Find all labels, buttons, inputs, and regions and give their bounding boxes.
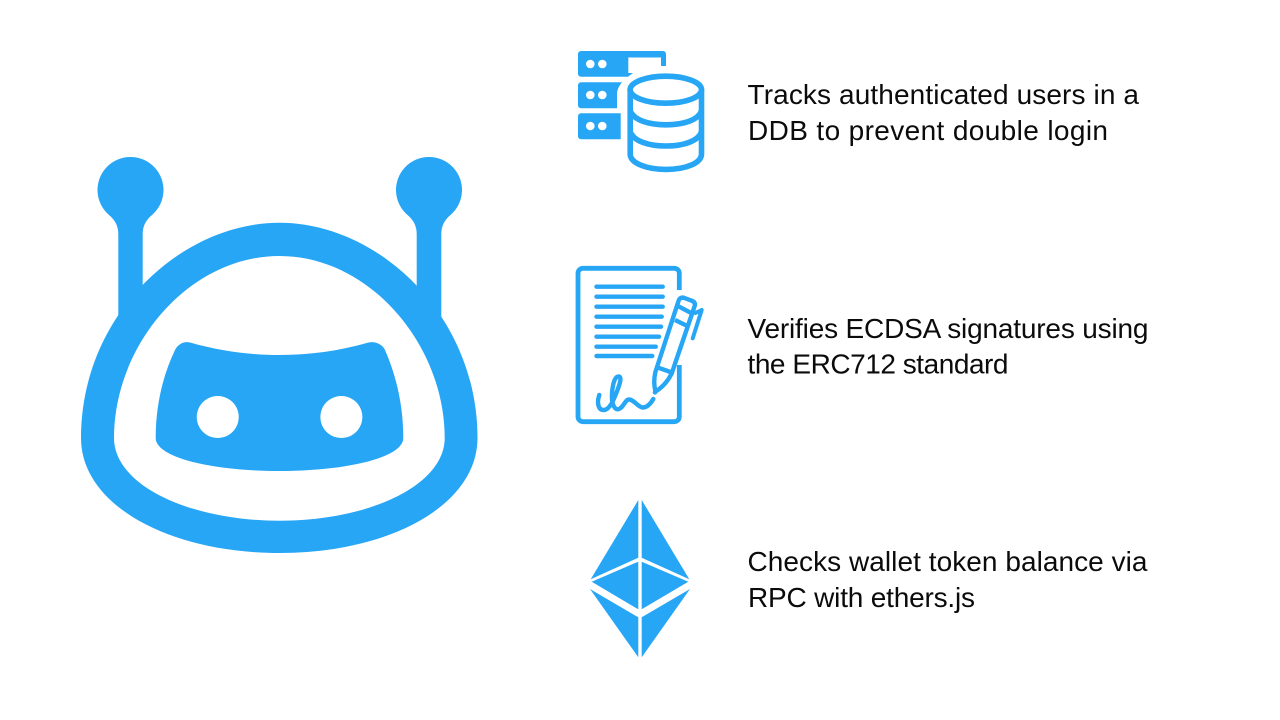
robot left antenna — [98, 157, 164, 330]
text block: ECDSA verification — [748, 313, 1148, 380]
database cylinder — [630, 76, 702, 169]
document text lines — [596, 287, 663, 356]
server rack — [578, 51, 666, 139]
text block: token balance — [748, 546, 1148, 613]
text block: DDB tracking: DDB to prevent double login — [748, 115, 1108, 146]
text block: DDB tracking: Tracks authenticated users in a — [748, 79, 1139, 110]
icon: database and servers — [578, 51, 702, 169]
icon: ethereum diamond — [590, 500, 690, 657]
text block: DDB tracking — [748, 79, 1139, 146]
text block: token balance: RPC with ethers.js — [748, 582, 975, 613]
icon: robot head — [81, 157, 478, 553]
server lights — [586, 60, 607, 130]
signature — [598, 376, 653, 410]
robot head outline — [81, 223, 478, 553]
text block: ECDSA verification: the ERC712 standard — [748, 348, 1008, 380]
text block: token balance: Checks wallet token balance via — [748, 546, 1148, 577]
icon: signed document with pen — [578, 268, 702, 422]
pen — [653, 298, 702, 394]
document outline — [578, 268, 679, 422]
robot visor with eyes — [156, 342, 403, 471]
text block: ECDSA verification: Verifies ECDSA signatures using — [748, 313, 1148, 344]
robot right antenna — [396, 157, 462, 330]
